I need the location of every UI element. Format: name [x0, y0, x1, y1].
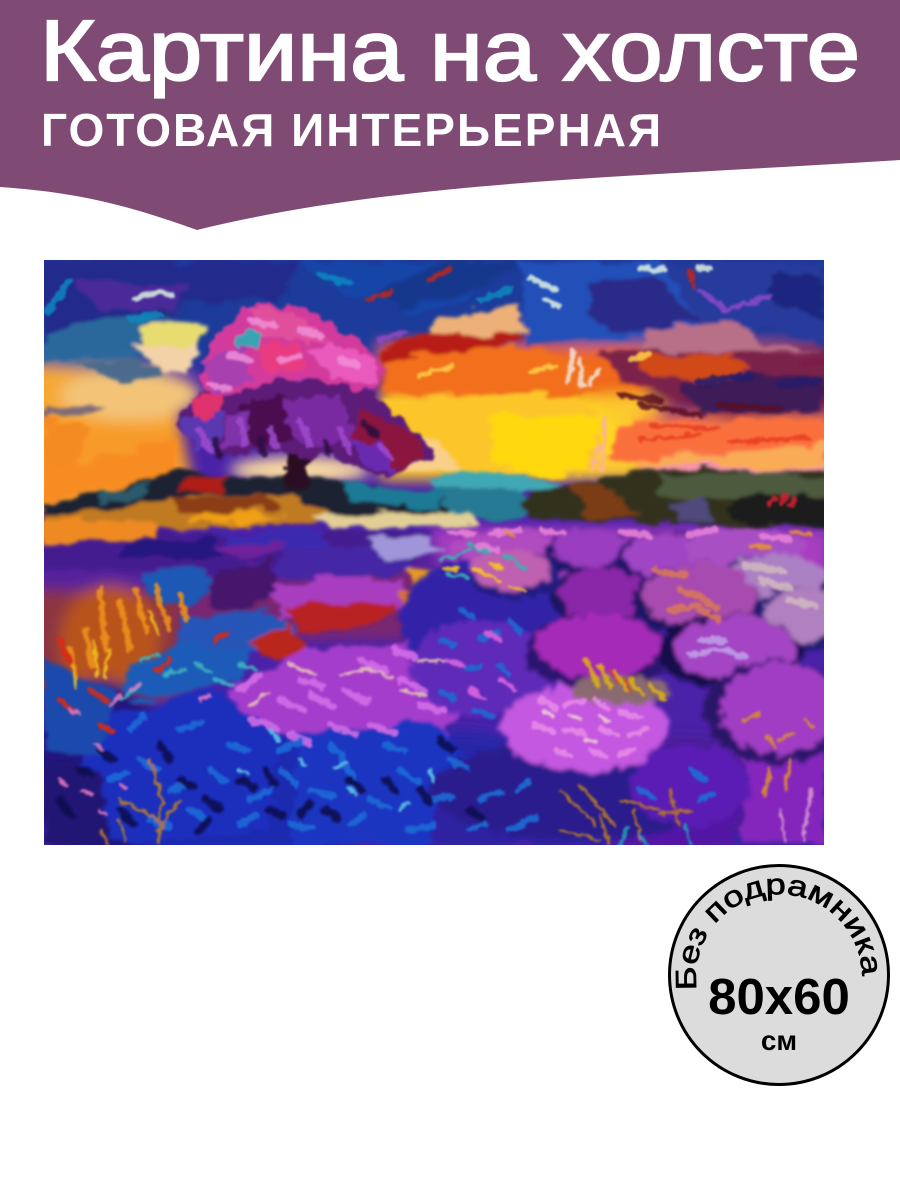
header banner	[0, 0, 900, 230]
distant hills	[432, 466, 830, 528]
sky highlight brush strokes	[48, 268, 820, 505]
badge: size without stretcher	[668, 864, 890, 1086]
unit: см	[761, 1025, 797, 1056]
lavender field base colours	[30, 528, 830, 865]
badge circle	[670, 866, 888, 1084]
sky cloud details	[44, 260, 824, 505]
left lavender patches	[44, 528, 824, 845]
painting: lavender field at sunset	[44, 260, 824, 845]
lavender brush strokes	[60, 530, 815, 845]
title: Картина на холсте	[40, 4, 860, 99]
curved label: Без подрамника	[676, 878, 878, 988]
lavender row mounds	[400, 528, 846, 840]
subtitle: ГОТОВАЯ ИНТЕРЬЕРНАЯ	[41, 104, 661, 156]
tree pink crown	[200, 304, 383, 394]
sky base colours	[20, 250, 840, 520]
size value: 80x60	[708, 968, 850, 1025]
tree	[176, 304, 436, 490]
tree lower canopy	[176, 379, 436, 476]
tree trunk	[281, 452, 315, 491]
foreground hill under the tree	[44, 470, 480, 545]
